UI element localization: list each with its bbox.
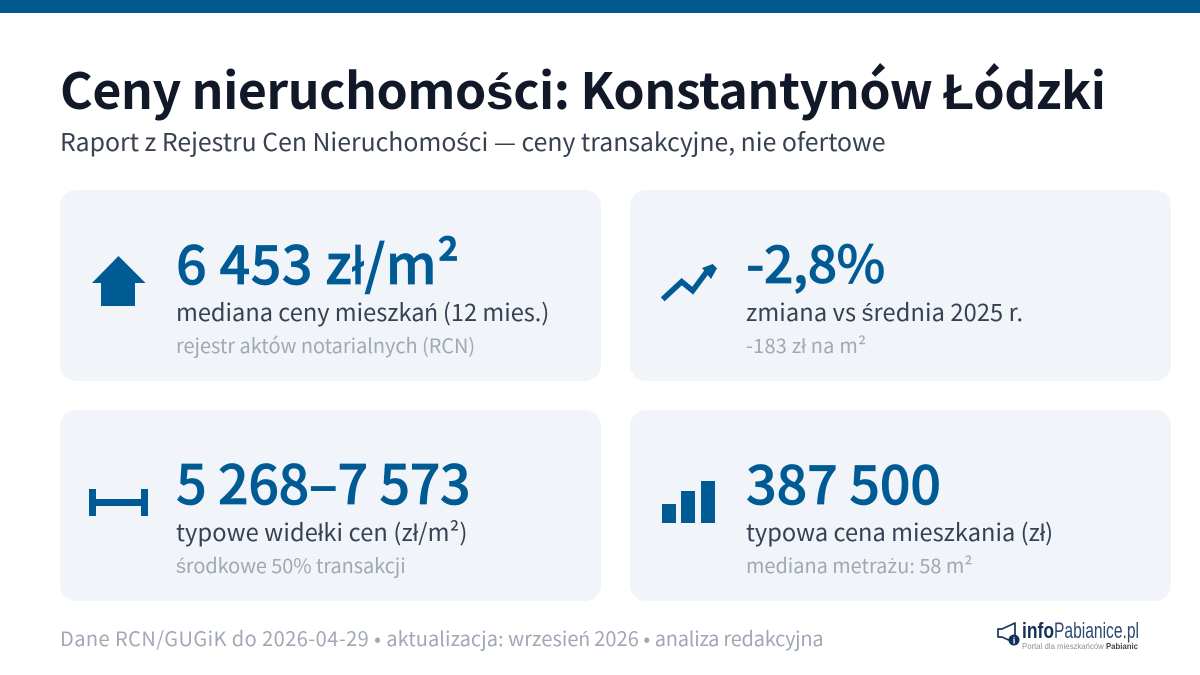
top bar (0, 0, 1200, 13)
logo tagline: Portal dla mieszkańców Pabianic (1022, 641, 1138, 651)
icon: bar chart (662, 481, 715, 523)
value: 5 268–7 573 (176, 441, 470, 520)
logo (997, 620, 1139, 651)
panel: price range (60, 410, 601, 601)
subtitle: Raport z Rejestru Cen Nieruchomości — ceny transakcyjne, nie ofertowe (60, 123, 886, 159)
panel: change (630, 190, 1171, 381)
panel: typical price (630, 410, 1171, 601)
label: mediana ceny mieszkań (12 mies.) (176, 294, 549, 328)
title: Ceny nieruchomości: Konstantynów Łódzki (60, 52, 1105, 124)
label: typowe widełki cen (zł/m²) (176, 514, 468, 548)
label: zmiana vs średnia 2025 r. (746, 294, 1023, 328)
note: mediana metrażu: 58 m² (746, 550, 972, 579)
note: -183 zł na m² (746, 330, 866, 359)
icon: house (92, 256, 146, 306)
value: 387 500 (746, 441, 941, 520)
label: typowa cena mieszkania (zł) (746, 514, 1053, 548)
value: 6 453 zł/m² (176, 221, 460, 300)
panel: median price (60, 190, 601, 381)
icon: megaphone: i (1013, 636, 1016, 646)
icon: trend arrow (660, 264, 717, 302)
icon: range bracket (89, 489, 148, 516)
note: rejestr aktów notarialnych (RCN) (176, 330, 475, 359)
footer source: Dane RCN/GUGiK do 2026-04-29 • aktualizacja: wrzesień 2026 • analiza redakcyjna (60, 623, 823, 652)
note: środkowe 50% transakcji (176, 550, 406, 579)
value: -2,8% (746, 223, 885, 298)
icon: megaphone (998, 623, 1020, 646)
